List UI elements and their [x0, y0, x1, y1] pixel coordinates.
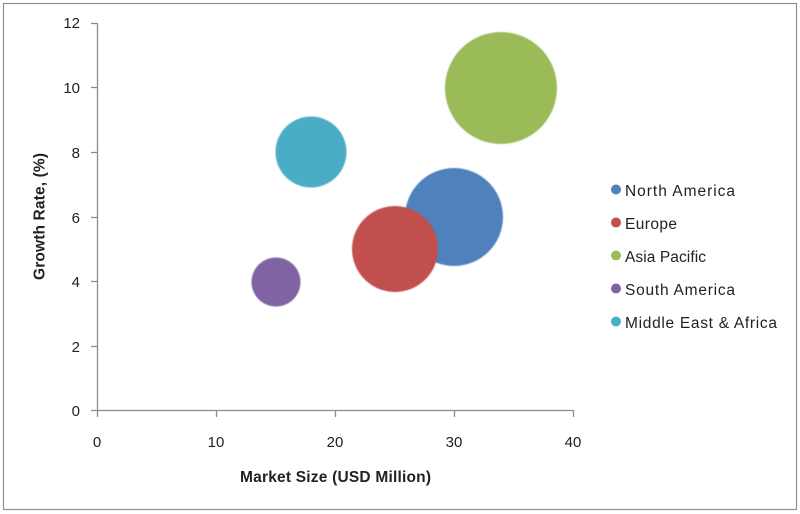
x axis title: Market Size (USD Million)	[240, 469, 431, 486]
y axis tick labels: 6	[72, 210, 80, 227]
bubble: Middle East and Africa	[276, 116, 346, 188]
legend: Europe	[625, 216, 677, 233]
y axis tick labels: 2	[72, 339, 80, 356]
y axis tick labels: 8	[72, 145, 80, 162]
y axis tick labels: 10	[63, 80, 80, 97]
bubble: South America	[252, 258, 300, 306]
x axis tick labels: 0	[93, 434, 101, 451]
y axis tick labels: 0	[72, 403, 80, 420]
legend: Asia Pacific	[625, 249, 706, 266]
y axis tick labels: 12	[63, 15, 80, 32]
legend: Middle East & Africa	[625, 315, 777, 332]
x axis tick labels: 20	[327, 434, 343, 451]
legend: North America	[625, 183, 735, 200]
y axis tick labels	[63, 15, 80, 420]
bubble: Europe	[352, 206, 438, 292]
y axis title: Growth Rate, (%)	[32, 153, 48, 280]
x axis tick labels: 30	[446, 434, 462, 451]
x axis tick labels	[93, 434, 581, 451]
legend	[611, 183, 777, 332]
bubble: Asia Pacific	[445, 32, 557, 144]
x axis tick labels: 40	[565, 434, 581, 451]
plot axes	[91, 23, 574, 417]
x axis tick labels: 10	[208, 434, 224, 451]
y axis tick labels: 4	[72, 274, 80, 291]
legend: South America	[625, 282, 735, 299]
bubble: North America	[405, 168, 503, 266]
